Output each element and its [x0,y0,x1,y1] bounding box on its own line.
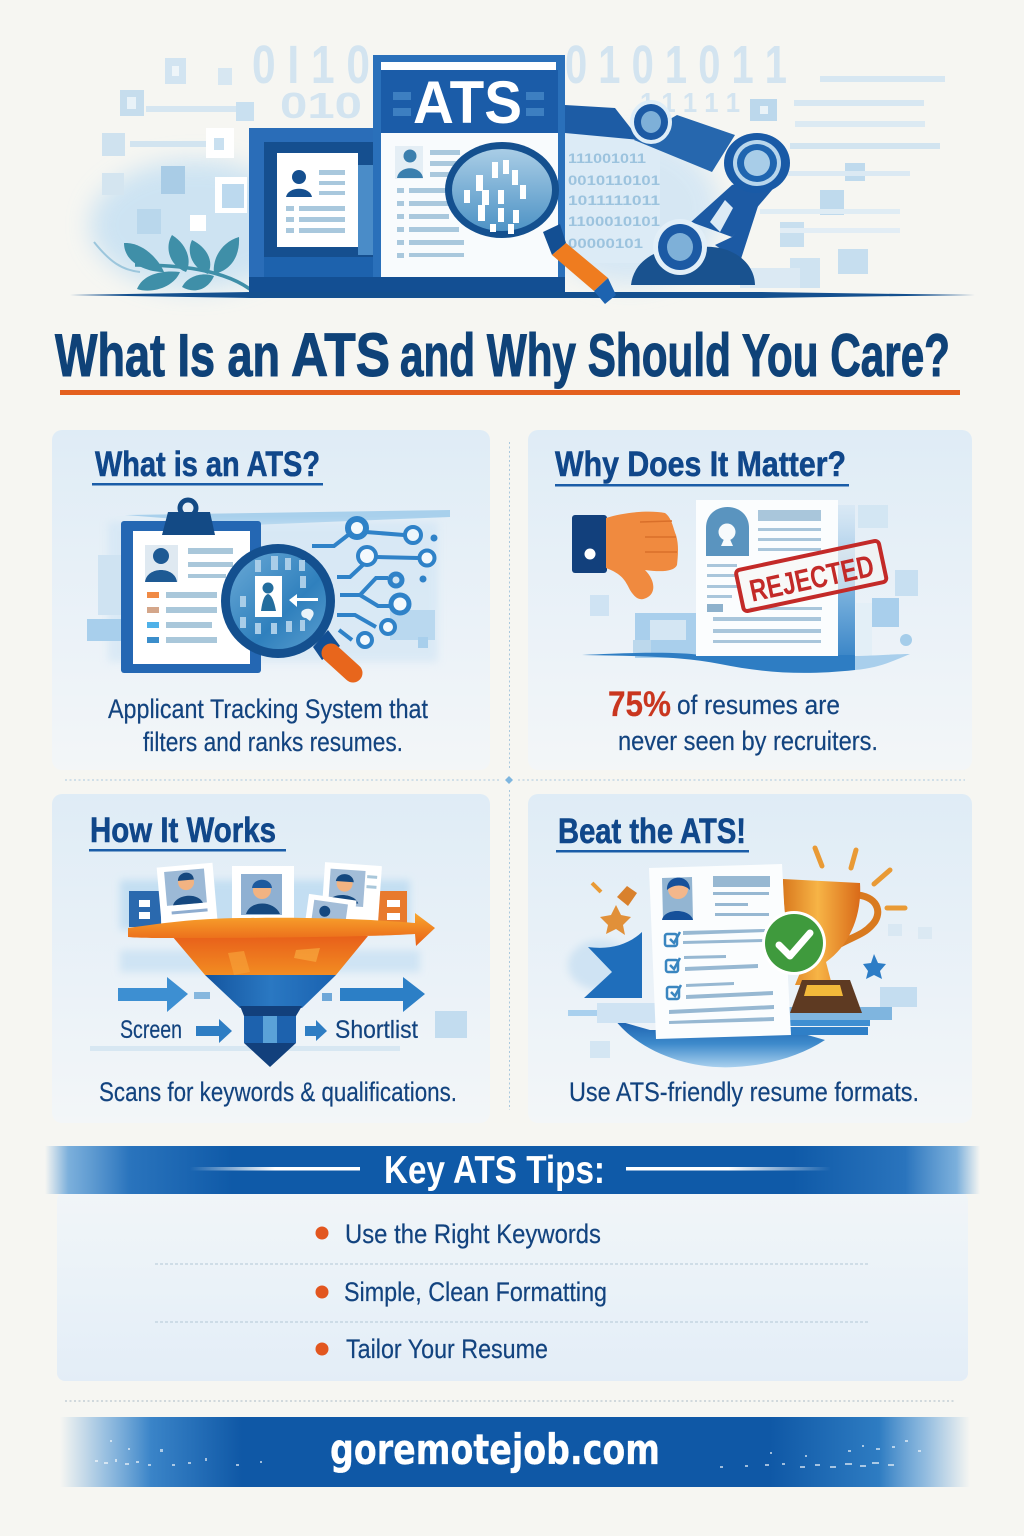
laptop screen with resume [249,128,373,292]
title: ATS [291,321,390,389]
binary data sheet behind arm: 0010110101 [568,172,660,188]
background streaks [90,880,467,1051]
icon: magnifying glass with candidate [221,544,353,673]
label: Shortlist: Shortlist [335,1016,418,1044]
footer banner [60,1417,970,1487]
heading: Beat the ATS!: Beat the ATS! [558,812,746,851]
description: Use ATS-friendly resume formats. [569,1077,919,1107]
heading: What is an ATS?: What is an ATS? [95,445,320,484]
icon: stars and diamond [592,883,886,979]
flow arrows [118,977,425,1043]
icon: trophy [783,879,878,1013]
background shapes [568,924,932,1067]
panel: Why Does It Matter? [528,430,972,770]
description with statistic: 75% [608,685,671,724]
description: Applicant Tracking System that [108,694,428,724]
binary data sheet behind arm: 1011111011 [568,192,660,208]
heading: How It Works: How It Works [90,811,276,850]
panel: How It Works [52,794,490,1123]
funnel rim with arrow [128,913,435,946]
panel: Beat the ATS! [528,794,972,1123]
icon: resume document [696,500,838,656]
tips banner [45,1146,980,1194]
binary data sheet behind arm: 1100010101 [568,213,660,229]
icon: thumbs down [572,512,678,599]
hero background data squares and streaks [90,58,945,290]
binary data sheet behind arm: 111001011 [568,150,646,166]
panel: Key ATS Tips [45,1146,980,1381]
icon: clipboard resume [121,500,261,673]
magnifying glass over resume [445,142,616,304]
tip: Tailor Your Resume: Tailor Your Resume [346,1334,548,1364]
description [108,694,428,757]
panel: What is an ATS? [52,430,490,770]
hero binary digits: 010 [280,85,362,126]
tip: Use the Right Keywords: Use the Right Keywords [345,1219,601,1249]
icon: resume checklist [649,864,791,1039]
description with statistic: of resumes are [677,690,840,720]
title: What Is an [55,322,280,389]
description: Scans for keywords & qualifications. [99,1077,457,1107]
robot arm [565,100,790,285]
heading: Why Does It Matter?: Why Does It Matter? [555,445,846,484]
description: filters and ranks resumes. [143,727,403,757]
clipboard clip [162,512,215,535]
title underline [60,390,960,395]
icon: ribbon [584,932,642,998]
ATS label: ATS [413,69,522,136]
title [55,321,950,389]
icon: funnel [128,913,435,1067]
icon: candidate cards [129,862,407,930]
background wash [87,510,450,662]
hero binary digits [252,35,787,126]
description with statistic: never seen by recruiters. [618,726,878,756]
plant [94,235,255,293]
binary data sheet behind arm [565,133,660,263]
central ATS document [373,55,565,287]
website address: goremotejob.com [330,1425,660,1474]
hero illustration: ATS scanning a resume [70,35,975,304]
binary data sheet behind arm: 00000101 [568,235,643,251]
dotted quadrant dividers [65,442,965,1110]
stamp: rejected: REJECTED [746,548,877,609]
ground line and base [70,277,975,298]
icon: circuit network [312,519,438,647]
description with statistic [608,685,878,756]
icon: green check badge [762,911,826,975]
tips heading: Key ATS Tips: [384,1149,605,1192]
background blocks and wave [582,505,918,673]
trophy sparkle rays [815,848,905,908]
hero binary digits: 0 1 0 1 0 1 1 [565,35,787,95]
hero binary digits: 1 1 1 1 1 [640,87,740,118]
hero binary digits: 0 I 1 0 [252,35,370,95]
tip: Simple, Clean Formatting: Simple, Clean Formatting [344,1277,607,1307]
label: Screen: Screen [120,1016,182,1044]
